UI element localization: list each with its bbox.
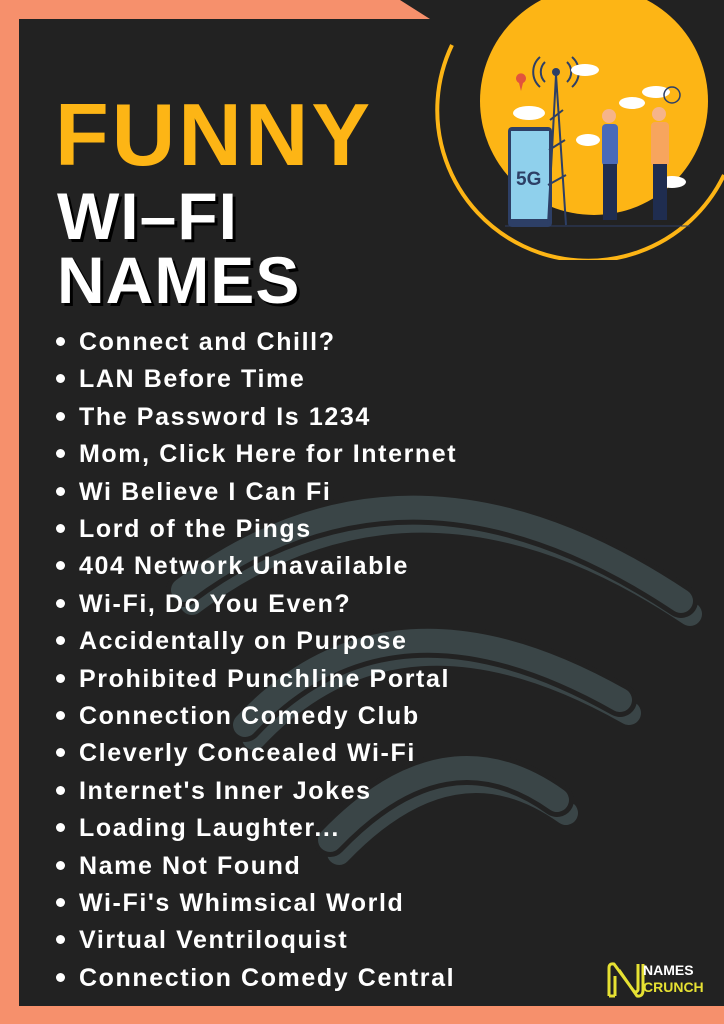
list of wifi names: Connection Comedy Club (79, 702, 420, 730)
list of wifi names: Wi Believe I Can Fi (79, 478, 331, 506)
list of wifi names: Lord of the Pings (79, 515, 312, 543)
list of wifi names: Wi-Fi, Do You Even? (79, 590, 351, 618)
list of wifi names: LAN Before Time (79, 365, 305, 393)
title: wi-fi: WI–FI (57, 179, 238, 253)
title: names: NAMES (57, 243, 300, 317)
list of wifi names: Connect and Chill? (79, 328, 336, 356)
list of wifi names: The Password Is 1234 (79, 403, 371, 431)
list of wifi names: Loading Laughter... (79, 814, 340, 842)
list of wifi names: 404 Network Unavailable (79, 552, 409, 580)
logo: names crunch: CRUNCH (643, 979, 704, 995)
logo: names crunch (608, 962, 704, 998)
list of wifi names: Name Not Found (79, 852, 301, 880)
logo: names crunch: NAMES (643, 962, 694, 978)
list of wifi names: Connection Comedy Central (79, 964, 455, 992)
list of wifi names: Virtual Ventriloquist (79, 926, 348, 954)
illustration circle: 5G (516, 169, 541, 190)
list of wifi names: Cleverly Concealed Wi-Fi (79, 739, 416, 767)
list of wifi names: Wi-Fi's Whimsical World (79, 889, 404, 917)
title: funny: FUNNY (55, 85, 373, 184)
list of wifi names: Prohibited Punchline Portal (79, 665, 450, 693)
list of wifi names (56, 328, 457, 992)
list of wifi names: Accidentally on Purpose (79, 627, 408, 655)
illustration circle (435, 0, 724, 260)
list of wifi names: Mom, Click Here for Internet (79, 440, 457, 468)
list of wifi names: Internet's Inner Jokes (79, 777, 372, 805)
